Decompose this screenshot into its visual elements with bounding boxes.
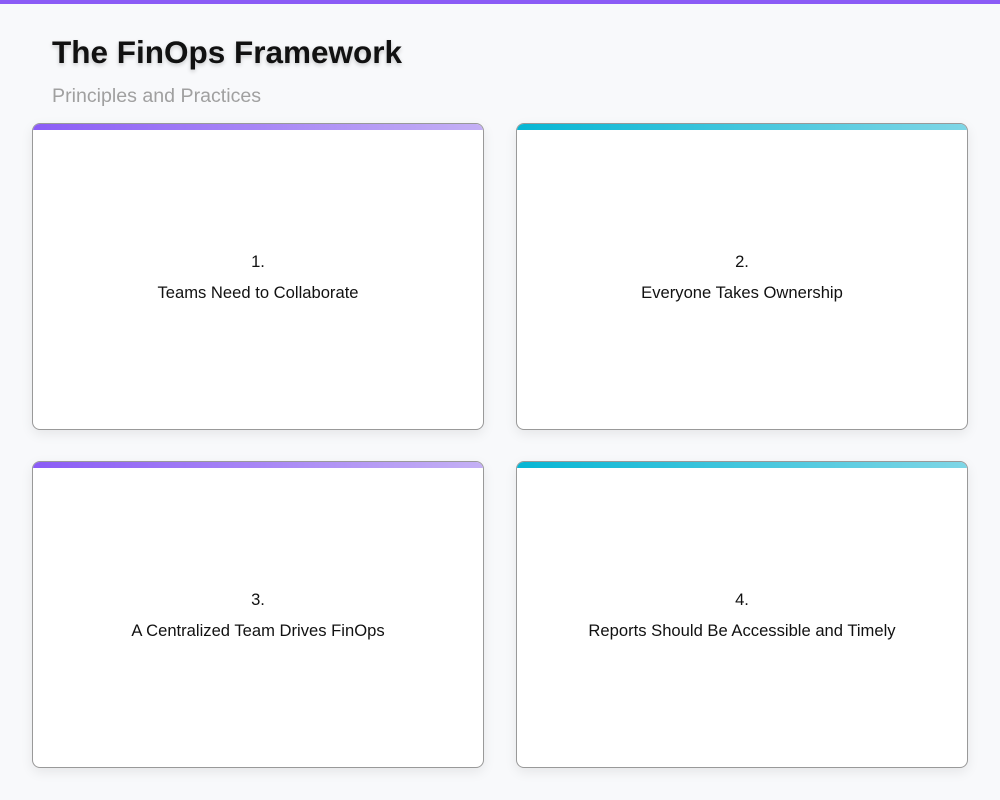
panel: principle 1 xyxy=(32,123,484,430)
panel: principle 2: Everyone Takes Ownership xyxy=(641,283,843,302)
panel: principle 2 xyxy=(516,123,968,430)
panel: principle 1: Teams Need to Collaborate xyxy=(157,283,359,302)
panel: principle 3: A Centralized Team Drives FinOps xyxy=(131,621,385,640)
panel: principle 3 xyxy=(32,461,484,768)
panel: principle 3: 3. xyxy=(251,590,265,609)
panel: principle 2: 2. xyxy=(735,252,749,271)
panel: principle 4: Reports Should Be Accessible and Timely xyxy=(588,621,896,640)
panel: principle 4 xyxy=(516,461,968,768)
title: The FinOps Framework xyxy=(52,34,402,70)
panel: principle 1: 1. xyxy=(251,252,265,271)
panel: principle 4: 4. xyxy=(735,590,749,609)
subtitle: Principles and Practices xyxy=(52,85,261,107)
top accent bar xyxy=(0,0,1000,4)
